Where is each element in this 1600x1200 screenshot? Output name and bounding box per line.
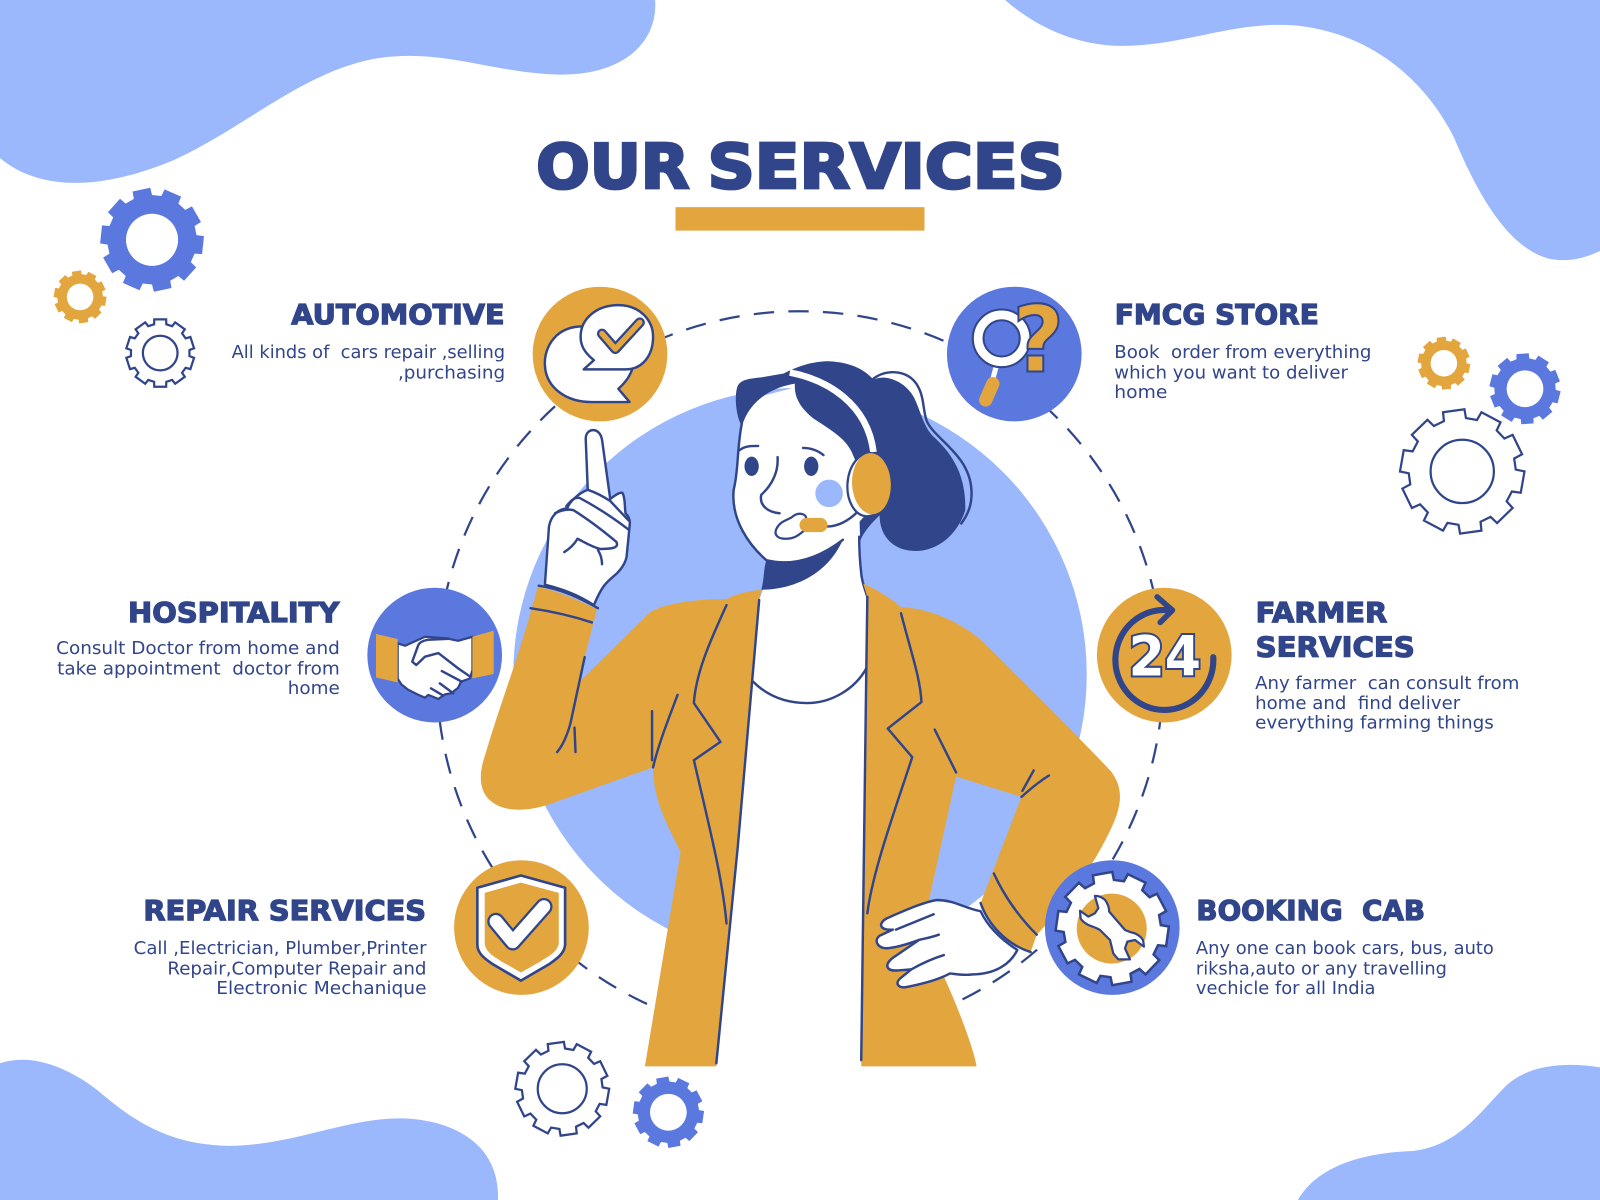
heading: REPAIR SERVICES xyxy=(143,895,426,927)
raised hand xyxy=(545,430,630,605)
gears: top left cluster xyxy=(50,183,208,396)
description: which you want to deliver xyxy=(1114,364,1349,384)
headset band xyxy=(790,372,873,452)
icon: 24 hour arrow: 24 xyxy=(1129,625,1201,689)
heading: FARMER xyxy=(1256,597,1387,629)
shirt and neck xyxy=(716,520,867,1066)
gears: right cluster xyxy=(1391,332,1568,543)
heading: BOOKING CAB xyxy=(1196,895,1425,927)
icon: chat bubbles xyxy=(533,287,667,421)
description xyxy=(1114,343,1371,403)
description xyxy=(1196,939,1494,999)
description: ,purchasing xyxy=(398,364,505,384)
background blob: bottom left xyxy=(0,1060,498,1200)
icon: gear and wrench xyxy=(1045,860,1180,995)
mouth xyxy=(776,514,806,539)
text: automotive xyxy=(232,299,505,384)
description: Any one can book cars, bus, auto xyxy=(1196,939,1494,959)
hip hand xyxy=(877,900,1017,987)
left jacket and raised sleeve xyxy=(481,587,761,1066)
dashed orbit ring xyxy=(437,311,1163,1038)
gear: outlined large right xyxy=(1391,400,1533,543)
mic arm xyxy=(827,511,858,527)
description: home and find deliver xyxy=(1255,694,1461,714)
description xyxy=(56,639,340,699)
icon: shield xyxy=(454,860,589,995)
gear: outlined xyxy=(118,310,203,396)
gear: blue right xyxy=(1482,346,1568,432)
title: OUR xyxy=(536,132,689,203)
description: riksha,auto or any travelling xyxy=(1196,959,1447,979)
hip hand finger lines xyxy=(896,903,1031,969)
gears: bottom cluster xyxy=(509,1035,708,1152)
gear: orange small right xyxy=(1413,332,1475,394)
background blob: top left xyxy=(0,0,655,183)
description: Any farmer can consult from xyxy=(1255,674,1519,694)
description: Electronic Mechanique xyxy=(216,979,427,999)
description: Call ,Electrician, Plumber,Printer xyxy=(134,939,427,959)
gear: outlined bottom xyxy=(509,1035,616,1143)
face xyxy=(733,378,869,562)
description: Repair,Computer Repair and xyxy=(167,959,427,979)
right jacket and arm xyxy=(861,584,1120,1066)
heading: FMCG STORE xyxy=(1115,299,1319,331)
title: SERVICES xyxy=(708,132,1065,203)
description: vechicle for all India xyxy=(1196,979,1376,999)
eyes xyxy=(744,457,818,476)
title underline bar xyxy=(676,207,924,231)
description xyxy=(134,939,427,999)
icon: magnifier and question mark: ? xyxy=(1012,286,1064,393)
description xyxy=(1255,674,1519,734)
gear: blue large xyxy=(96,183,208,296)
description: Book order from everything xyxy=(1114,343,1371,363)
text: hospitality xyxy=(56,597,340,699)
jacket line work xyxy=(531,597,1049,1063)
back hair outline xyxy=(873,372,972,523)
headset ear cup back xyxy=(845,452,891,518)
face outline xyxy=(733,423,843,562)
text: fmcg store xyxy=(1114,299,1371,403)
description: everything farming things xyxy=(1255,714,1494,734)
description: Consult Doctor from home and xyxy=(56,639,340,659)
text: booking cab xyxy=(1196,895,1494,999)
cheek xyxy=(815,480,843,507)
front hair xyxy=(736,361,903,500)
light blue central circle xyxy=(513,388,1087,961)
headset ear cup xyxy=(850,452,892,515)
gear: blue bottom xyxy=(629,1072,708,1152)
back hair xyxy=(859,378,965,551)
neck right line xyxy=(859,537,867,597)
icon: 24 hour arrow xyxy=(1097,588,1232,722)
eyebrows and nose xyxy=(740,446,823,513)
background blob: bottom right xyxy=(1298,1065,1600,1200)
neck shadow xyxy=(761,540,843,590)
description: home xyxy=(288,679,340,699)
gear: orange small xyxy=(50,267,110,327)
background blob: top right xyxy=(1005,0,1600,260)
heading: AUTOMOTIVE xyxy=(291,299,505,331)
description xyxy=(232,343,505,384)
heading: HOSPITALITY xyxy=(128,597,340,629)
mic xyxy=(799,518,828,532)
text: farmer services xyxy=(1255,597,1519,734)
icon: magnifier and question mark xyxy=(947,286,1082,421)
title xyxy=(536,132,1065,203)
heading xyxy=(1256,597,1415,664)
description: take appointment doctor from xyxy=(57,659,340,679)
description: All kinds of cars repair ,selling xyxy=(232,343,505,363)
heading: SERVICES xyxy=(1256,632,1415,664)
woman illustration xyxy=(481,361,1120,1066)
icon: handshake xyxy=(367,588,502,722)
text: repair services xyxy=(134,895,427,999)
description: home xyxy=(1114,383,1167,403)
raised hand finger lines xyxy=(539,490,629,608)
